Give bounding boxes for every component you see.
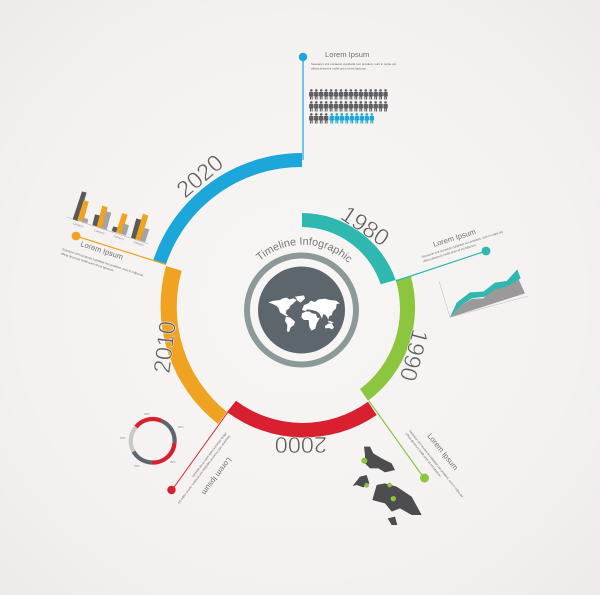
year label: 2010: 2010 bbox=[149, 320, 181, 375]
heading: Lorem Ipsum bbox=[432, 227, 477, 249]
callout: 1990 bbox=[353, 401, 465, 525]
donut chart bbox=[120, 412, 184, 468]
bar chart: Category bbox=[113, 234, 125, 241]
leader line bbox=[396, 251, 486, 281]
body text: Seasarun sint occaecat cupidatat non proident, sunt in culpa qui bbox=[177, 434, 231, 505]
heading: Lorem Ipsum bbox=[425, 432, 460, 472]
bar chart: Category bbox=[133, 240, 145, 247]
leader line bbox=[302, 57, 304, 160]
donut chart: 25% bbox=[144, 412, 150, 416]
dot bbox=[72, 232, 80, 240]
dot bbox=[420, 474, 429, 482]
body text: Seasarun sint occaecat cupidatat non proident, sunt in culpa qui bbox=[421, 230, 503, 259]
icon: world map bbox=[268, 295, 340, 332]
callout: 1980 bbox=[396, 227, 528, 317]
dot bbox=[482, 247, 490, 255]
dot bbox=[167, 486, 176, 494]
area chart bbox=[439, 269, 528, 317]
year label: 2020: 2020 bbox=[172, 149, 228, 203]
center emblem bbox=[247, 256, 356, 364]
arc: 2010 orange bbox=[161, 266, 227, 424]
body text: officia deserunt mollit anim id est laborum. bbox=[60, 252, 115, 273]
disc bbox=[258, 266, 345, 354]
heading: Lorem Ipsum bbox=[200, 456, 234, 497]
callout: 2010 bbox=[60, 191, 166, 282]
body text: officia deserunt mollit anim id est laborum. bbox=[191, 432, 228, 479]
ring bbox=[247, 256, 356, 364]
arc: 2000 red bbox=[227, 401, 377, 437]
body text: Seasarun sint occaecat cupidatat non proident, sunt in culpa qui bbox=[62, 247, 144, 277]
heading: Lorem Ipsum bbox=[79, 239, 124, 262]
arc: 1980 teal bbox=[302, 213, 396, 284]
title: Timeline Infographic: Timeline Infographic bbox=[256, 237, 352, 262]
leader line bbox=[172, 412, 228, 490]
year label: 2000: 2000 bbox=[275, 432, 327, 458]
panel: spiral timeline bbox=[153, 153, 415, 437]
arc: 2020 blue bbox=[153, 153, 302, 264]
map with markers bbox=[353, 447, 422, 525]
body text: officia deserunt mollit anim id est laborum. bbox=[405, 432, 443, 478]
bar chart: Category bbox=[72, 221, 84, 228]
donut chart: 25% bbox=[178, 425, 184, 429]
pictogram bbox=[309, 89, 388, 124]
dot bbox=[299, 53, 307, 61]
body text: officia deserunt mollit anim id est laborum. bbox=[422, 243, 477, 263]
donut chart: 15% bbox=[134, 464, 140, 468]
bar chart: Category bbox=[94, 228, 106, 235]
body text: Seasarun sint occaecat cupidatat non proident, sunt in culpa qui bbox=[408, 429, 464, 498]
donut chart: 25% bbox=[170, 460, 176, 464]
callout: 2000 bbox=[120, 412, 234, 505]
bar chart bbox=[67, 191, 149, 247]
leader line bbox=[76, 236, 166, 264]
leader line bbox=[369, 401, 424, 478]
donut chart: 10% bbox=[120, 436, 126, 440]
body text: officia deserunt mollit anim id est laborum. bbox=[311, 67, 367, 71]
year label: 1980: 1980 bbox=[336, 201, 394, 251]
callout: 2020 bbox=[299, 50, 396, 160]
year label: 1990: 1990 bbox=[395, 327, 433, 384]
body text: Seasarun sint occaecat cupidatat non proident, sunt in culpa qui bbox=[311, 62, 396, 66]
arc: 1990 green bbox=[360, 276, 415, 401]
heading: Lorem Ipsum bbox=[325, 50, 369, 59]
